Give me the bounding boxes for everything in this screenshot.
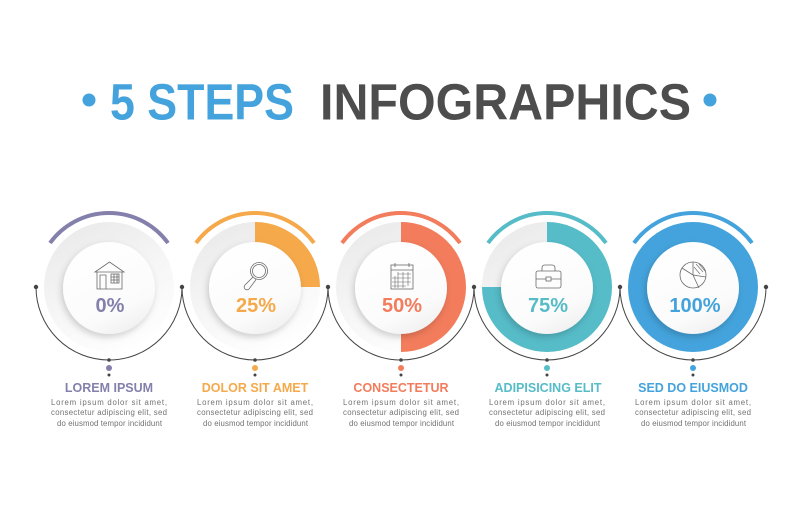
step 1 <box>44 213 174 428</box>
heading: CONSECTETUR <box>353 381 449 395</box>
text block: consectetur adipiscing elit, sed <box>51 408 167 417</box>
text block <box>489 398 605 428</box>
inner circle <box>647 242 739 334</box>
text block: Lorem ipsum dolor sit amet, <box>635 398 751 407</box>
step 3 <box>336 213 466 428</box>
progress disc 75% <box>482 222 612 352</box>
text block: do eiusmod tempor incididunt <box>495 419 601 428</box>
inner circle <box>63 242 155 334</box>
step 2 <box>190 213 320 428</box>
icon: house <box>95 262 124 289</box>
icon: briefcase <box>536 265 561 288</box>
text block: do eiusmod tempor incididunt <box>203 419 309 428</box>
text block: Lorem ipsum dolor sit amet, <box>343 398 459 407</box>
inner circle <box>501 242 593 334</box>
arc: blue <box>634 213 752 243</box>
bottom dots <box>252 358 258 376</box>
text block: do eiusmod tempor incididunt <box>57 419 163 428</box>
arc: coral <box>342 213 460 243</box>
text block: consectetur adipiscing elit, sed <box>635 408 751 417</box>
arc: purple <box>50 213 168 243</box>
text block <box>197 398 313 428</box>
title: INFOGRAPHICS <box>320 74 691 130</box>
text block <box>343 398 459 428</box>
bottom dots <box>690 358 696 376</box>
heading: ADIPISICING ELIT <box>495 381 602 395</box>
progress disc 0% <box>44 222 174 352</box>
connector line with nodes <box>34 285 768 360</box>
text block: Lorem ipsum dolor sit amet, <box>197 398 313 407</box>
text block: Lorem ipsum dolor sit amet, <box>51 398 167 407</box>
heading: SED DO EIUSMOD <box>638 381 748 395</box>
text block: do eiusmod tempor incididunt <box>641 419 747 428</box>
percent: 50% <box>382 295 422 317</box>
bottom dots <box>544 358 550 376</box>
progress disc 25% <box>190 222 320 352</box>
icon: calendar <box>391 263 413 289</box>
heading: DOLOR SIT AMET <box>202 381 309 395</box>
text block: do eiusmod tempor incididunt <box>349 419 455 428</box>
text block <box>635 398 751 428</box>
inner circle <box>209 242 301 334</box>
text block: Lorem ipsum dolor sit amet, <box>489 398 605 407</box>
title: 5 STEPS <box>110 74 294 130</box>
bottom dots <box>398 358 404 376</box>
percent: 75% <box>528 295 568 317</box>
bottom dots <box>106 358 112 376</box>
text block: consectetur adipiscing elit, sed <box>197 408 313 417</box>
progress disc 50% <box>336 222 466 352</box>
arc: orange <box>196 213 314 243</box>
step 4 <box>482 213 612 428</box>
progress disc 100% <box>628 222 758 352</box>
heading: LOREM IPSUM <box>65 381 153 395</box>
text block: consectetur adipiscing elit, sed <box>489 408 605 417</box>
percent: 100% <box>669 295 721 317</box>
text block <box>51 398 167 428</box>
title <box>82 74 716 130</box>
icon: pie chart <box>680 262 706 288</box>
percent: 0% <box>96 295 125 317</box>
text block: consectetur adipiscing elit, sed <box>343 408 459 417</box>
inner circle <box>355 242 447 334</box>
arc: teal <box>488 213 606 243</box>
percent: 25% <box>236 295 276 317</box>
icon: magnifier <box>244 262 268 290</box>
step 5 <box>628 213 758 428</box>
